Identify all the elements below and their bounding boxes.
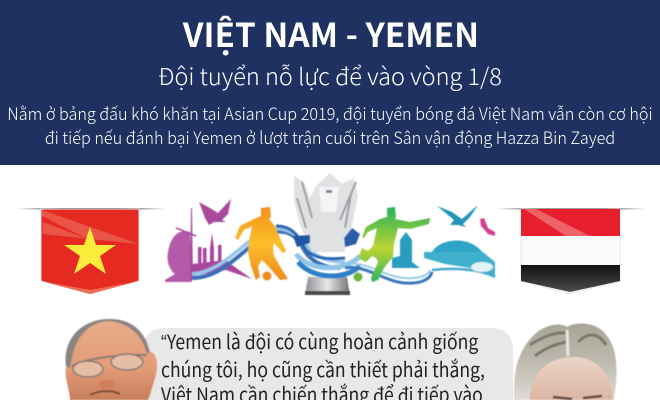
flag: Yemen	[497, 208, 645, 294]
quote text: “Yemen là đội có cùng hoàn cảnh giống	[161, 326, 478, 355]
Asian Cup illustration	[165, 173, 495, 295]
portrait: Yemen coach	[514, 324, 616, 400]
tower: blue	[392, 232, 420, 268]
flag: Vietnam	[17, 208, 165, 294]
intro text	[7, 100, 653, 149]
icon: yellow star	[64, 227, 116, 274]
bird: blue	[437, 205, 478, 227]
subtitle: Đội tuyển nỗ lực để vào vòng 1/8	[158, 58, 502, 92]
ball: orange	[262, 272, 272, 280]
ribbons right	[345, 267, 432, 283]
purple skyline	[165, 208, 252, 282]
ball: green	[354, 272, 362, 282]
footballer: green	[358, 207, 430, 282]
trophy	[293, 173, 360, 295]
bird: purple	[199, 199, 231, 225]
quote bubble	[143, 328, 513, 400]
ribbons left	[192, 232, 340, 278]
footballer: orange	[235, 207, 288, 280]
intro text: đi tiếp nếu đánh bại Yemen ở lượt trận cuối trên Sân vận động Hazza Bin Zayed	[45, 124, 615, 149]
dome: blue	[424, 240, 495, 277]
intro text: Nằm ở bảng đấu khó khăn tại Asian Cup 2019, đội tuyển bóng đá Việt Nam vẫn còn cơ hội	[7, 100, 653, 125]
quote text: chúng tôi, họ cũng cần thiết phải thắng,	[161, 354, 485, 383]
pink shape	[480, 218, 495, 236]
portrait: Vietnam coach	[65, 319, 157, 400]
header band	[0, 0, 660, 165]
title: VIỆT NAM - YEMEN	[183, 8, 479, 57]
quote text	[161, 326, 485, 400]
